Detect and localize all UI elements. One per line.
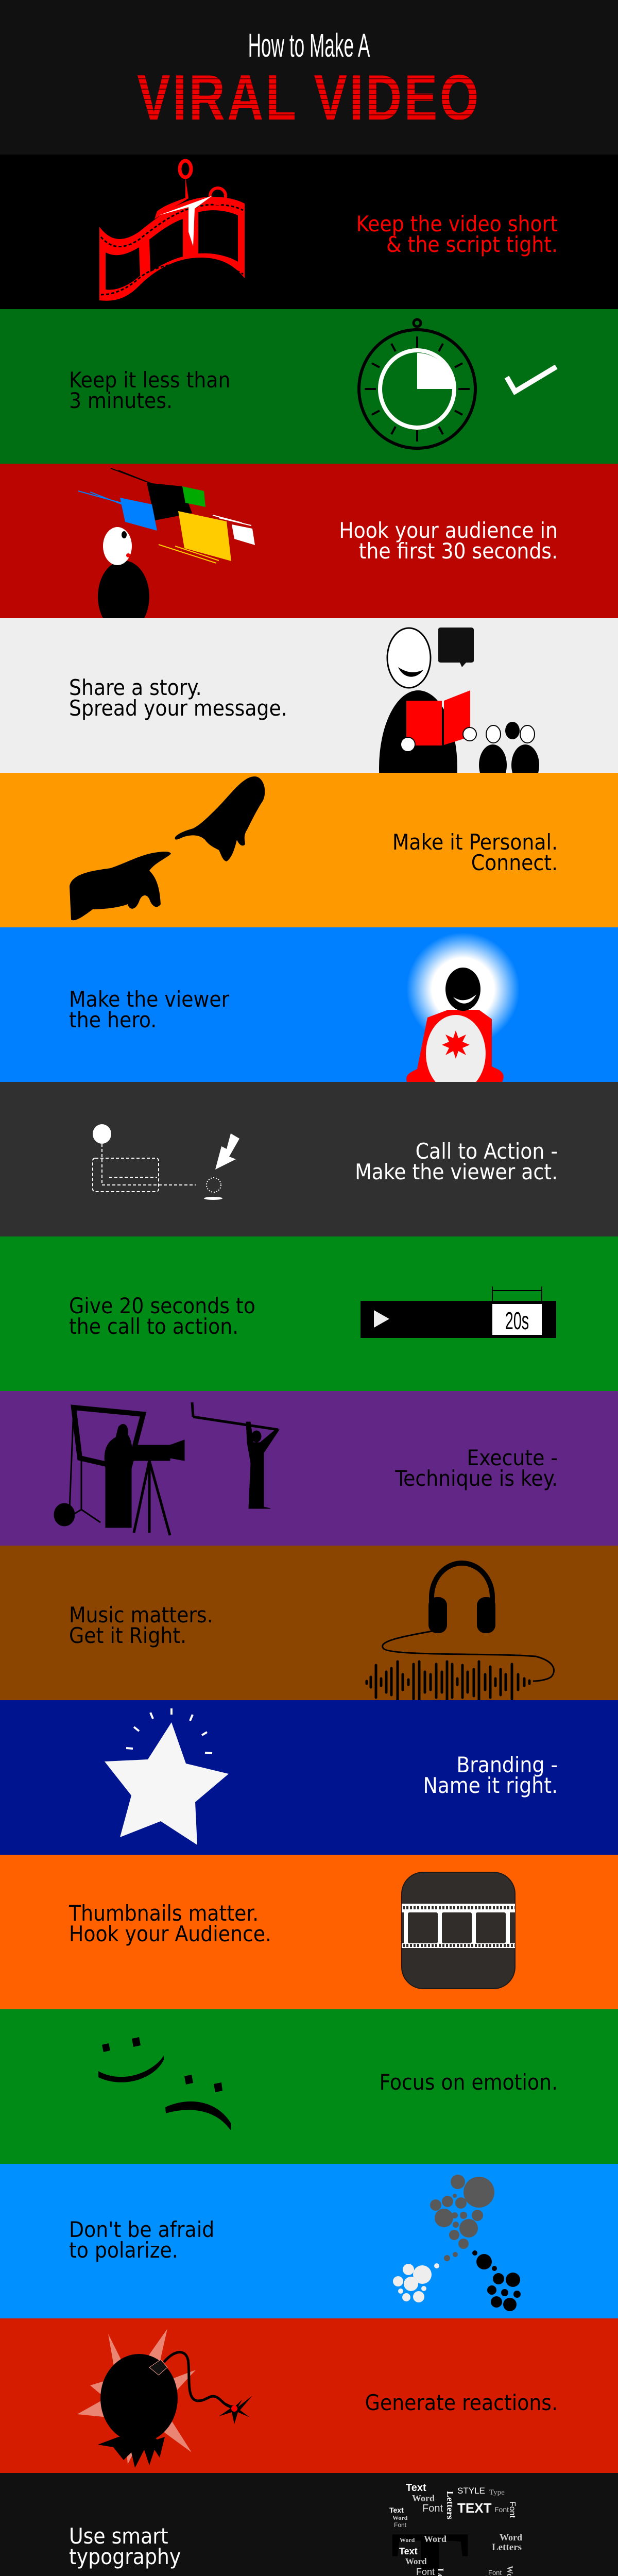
icon: word cloud T: Letters bbox=[492, 2542, 522, 2553]
text: branding: Name it right. bbox=[423, 1773, 558, 1798]
text: personal: Connect. bbox=[471, 850, 558, 875]
text: branding bbox=[423, 1752, 558, 1798]
panel: 20 seconds bbox=[0, 1236, 618, 1391]
icon: dot clusters bbox=[393, 2175, 521, 2311]
panel: hero bbox=[0, 927, 618, 1082]
icon: progress bar bbox=[360, 1286, 556, 1338]
icon: word cloud T: Text bbox=[406, 2482, 426, 2494]
icon: film crew silhouettes bbox=[54, 1402, 280, 1536]
icon: filmstrip with scissors bbox=[99, 159, 245, 301]
icon: word cloud T: Font bbox=[508, 2501, 517, 2518]
icon: storyteller with kids bbox=[379, 628, 539, 773]
text: hero bbox=[69, 987, 230, 1032]
text: call to action bbox=[355, 1139, 558, 1184]
text: hero: Make the viewer bbox=[69, 987, 229, 1012]
icon: stopwatch and check bbox=[357, 318, 557, 450]
panel: execute bbox=[0, 1391, 618, 1546]
text: typography bbox=[69, 2523, 181, 2569]
icon: word cloud T: Font bbox=[422, 2503, 443, 2514]
icon: word cloud T: Word bbox=[392, 2514, 408, 2521]
icon: word cloud T: Letters bbox=[445, 2491, 455, 2519]
text: call to action: Make the viewer act. bbox=[355, 1159, 558, 1184]
panel: 3 minutes bbox=[0, 309, 618, 464]
icon: word cloud T: Font bbox=[394, 2521, 407, 2529]
text: polarize: Don't be afraid bbox=[69, 2217, 214, 2242]
text: 20 seconds: Give 20 seconds to bbox=[69, 1293, 255, 1318]
text: hook: the first 30 seconds. bbox=[359, 538, 558, 564]
text: thumbnails: Thumbnails matter. bbox=[69, 1901, 259, 1926]
text: keep short: & the script tight. bbox=[386, 232, 558, 257]
icon: word cloud T: Text bbox=[389, 2506, 404, 2514]
panel: personal bbox=[0, 773, 618, 927]
text: thumbnails: Hook your Audience. bbox=[69, 1921, 271, 1946]
text: emotion: Focus on emotion. bbox=[380, 2070, 558, 2095]
panel: hook audience bbox=[0, 464, 618, 618]
text: hero: the hero. bbox=[69, 1007, 157, 1032]
text: music bbox=[69, 1602, 213, 1648]
text: execute bbox=[395, 1445, 558, 1491]
text: hook: Hook your audience in bbox=[339, 518, 558, 543]
icon: glowing hero bbox=[406, 934, 519, 1082]
icon: dashed path and arrow bbox=[92, 1124, 239, 1200]
icon: word cloud T: Word bbox=[405, 2556, 427, 2566]
text: music: Music matters. bbox=[69, 1602, 213, 1628]
text: personal: Make it Personal. bbox=[392, 829, 558, 855]
icon: word cloud T: Word bbox=[500, 2532, 522, 2543]
text: hook bbox=[339, 518, 558, 564]
icon: headphones with waveform bbox=[366, 1561, 555, 1700]
text: 20 seconds: the call to action. bbox=[69, 1314, 238, 1339]
panel: keep short bbox=[0, 155, 618, 309]
text: polarize bbox=[69, 2217, 214, 2263]
icon: word cloud T: Font bbox=[494, 2505, 509, 2514]
icon: word cloud T bbox=[389, 2482, 522, 2576]
text: 3 minutes bbox=[69, 367, 230, 413]
panel: typography bbox=[0, 2473, 618, 2576]
icon: word cloud T: TEXT bbox=[457, 2500, 492, 2516]
icon: word cloud T: Word bbox=[424, 2534, 447, 2544]
icon: word cloud T: Word bbox=[400, 2536, 415, 2544]
icon: happy and sad faces bbox=[98, 2037, 231, 2130]
panel: music bbox=[0, 1546, 618, 1700]
panel: thumbnails bbox=[0, 1855, 618, 2009]
panel: call to action bbox=[0, 1082, 618, 1236]
text: execute: Execute - bbox=[467, 1445, 558, 1470]
icon: word cloud T: Text bbox=[399, 2546, 418, 2556]
text: music: Get it Right. bbox=[69, 1623, 186, 1648]
text: personal bbox=[392, 829, 558, 875]
text: execute: Technique is key. bbox=[395, 1466, 558, 1491]
panel: share story bbox=[0, 618, 618, 773]
header bbox=[0, 0, 618, 155]
text: keep short bbox=[356, 211, 558, 257]
text: share story: Share a story. bbox=[69, 675, 202, 700]
icon: word cloud T: Word bbox=[412, 2493, 435, 2503]
text: share story: Spread your message. bbox=[69, 696, 287, 721]
text: 3 minutes: Keep it less than bbox=[69, 367, 230, 393]
text: thumbnails bbox=[69, 1901, 271, 1946]
icon: word cloud T: Type bbox=[489, 2488, 505, 2497]
icon: word cloud T: STYLE bbox=[457, 2486, 485, 2496]
text: keep short: Keep the video short bbox=[356, 211, 558, 236]
text: 3 minutes: 3 minutes. bbox=[69, 388, 173, 413]
panel: emotion bbox=[0, 2009, 618, 2164]
panel: polarize bbox=[0, 2164, 618, 2318]
title: VIRAL VIDEO: VIRAL VIDEO bbox=[137, 62, 481, 133]
text: call to action: Call to Action - bbox=[416, 1139, 558, 1164]
panel: branding bbox=[0, 1700, 618, 1855]
icon: bomb bbox=[77, 2329, 252, 2468]
text: reactions: Generate reactions. bbox=[365, 2390, 558, 2415]
icon: star with rays bbox=[105, 1708, 229, 1845]
panel: reactions bbox=[0, 2318, 618, 2473]
text: typography: Use smart bbox=[69, 2523, 168, 2549]
title: How to Make A: How to Make A bbox=[248, 27, 370, 64]
text: branding: Branding - bbox=[456, 1752, 558, 1777]
text: typography: typography bbox=[69, 2544, 181, 2569]
text: share story bbox=[69, 675, 287, 721]
icon: film thumbnail bbox=[401, 1872, 516, 1989]
text: 20 seconds bbox=[69, 1293, 255, 1339]
icon: person watching flying screens bbox=[78, 468, 255, 618]
title: VIRAL VIDEO bbox=[68, 66, 550, 130]
icon: touching hands bbox=[70, 776, 265, 920]
icon: progress bar: 20s bbox=[505, 1308, 529, 1335]
text: polarize: to polarize. bbox=[69, 2238, 178, 2263]
